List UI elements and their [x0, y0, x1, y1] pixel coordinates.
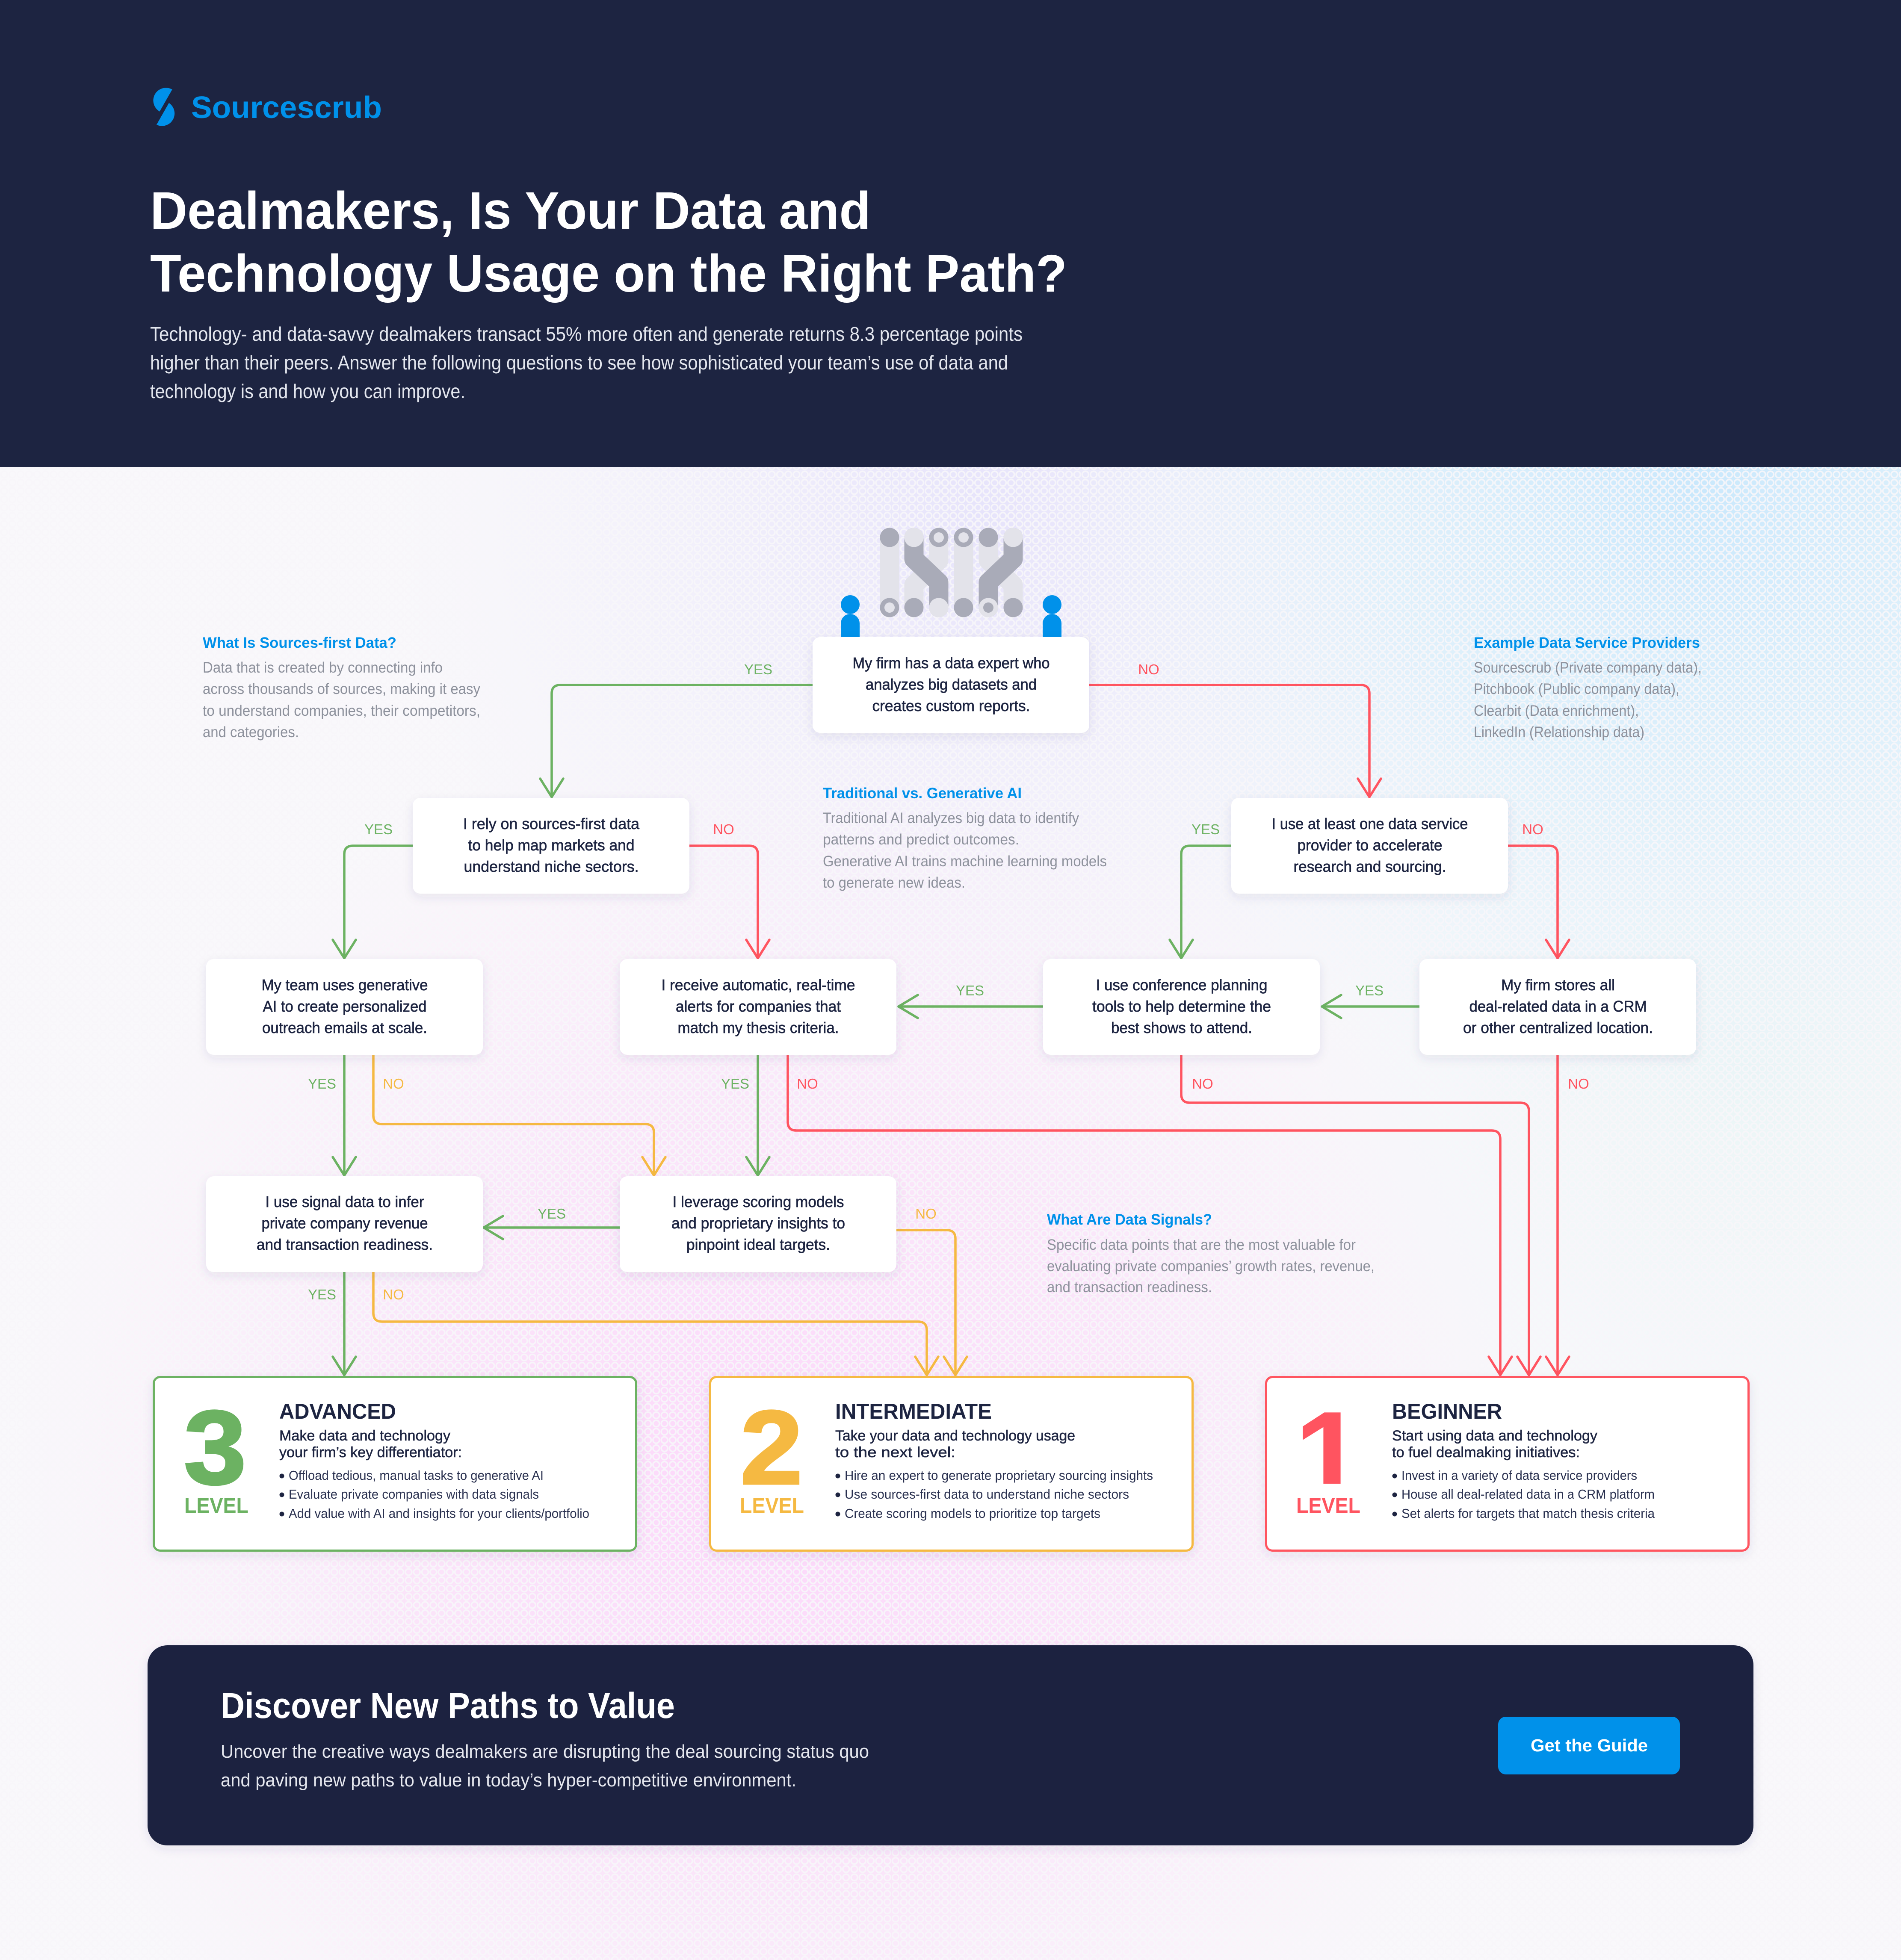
level bullet list: House all deal-related data in a CRM platform [1401, 1487, 1655, 1502]
question card: data service provider [1231, 798, 1508, 894]
level bullet list: Create scoring models to prioritize top targets [845, 1506, 1100, 1521]
question card: CRM: or other centralized location. [1463, 1019, 1653, 1036]
arrow: data provider no [1508, 846, 1569, 958]
note: traditional vs generative AI [823, 785, 1107, 891]
logo: Sourcescrub [153, 88, 382, 126]
level label: LEVEL [1296, 1494, 1360, 1517]
level subhead: Take your data and technology usage [835, 1428, 1075, 1444]
question card: conference planning [1043, 959, 1320, 1055]
arrow labels: NO [1522, 821, 1543, 837]
arrow: alerts yes [746, 1055, 769, 1175]
note: sources-first data: and categories. [203, 724, 299, 741]
arrow labels: NO [1138, 661, 1159, 677]
arrow labels: NO [797, 1076, 818, 1092]
intro text: technology is and how you can improve. [150, 380, 465, 402]
question card: scoring models: I leverage scoring models [672, 1193, 844, 1210]
panel: level 2 intermediate [710, 1377, 1192, 1550]
note: sources-first data [203, 635, 480, 741]
icon: crossing data paths [880, 528, 1023, 617]
icon: right person [1043, 595, 1061, 638]
button: get the guide [1498, 1717, 1680, 1774]
note: traditional vs generative AI: patterns and predict outcomes. [823, 831, 1019, 848]
arrow labels: YES [1355, 983, 1384, 998]
level bullet list: Set alerts for targets that match thesis criteria [1401, 1506, 1655, 1521]
question card: scoring models: and proprietary insights to [671, 1214, 845, 1232]
intro text [150, 323, 1023, 402]
level subhead: to the next level: [835, 1444, 955, 1461]
arrow: data provider yes [1170, 846, 1231, 958]
question card: data expert: creates custom reports. [872, 697, 1030, 714]
question card: data service provider: I use at least one data service [1272, 815, 1468, 832]
arrow labels: YES [538, 1206, 566, 1222]
cta body: Uncover the creative ways dealmakers are disrupting the deal sourcing status quo [221, 1741, 869, 1762]
flowchart background [0, 467, 1901, 1960]
note: example data service providers: Clearbit (Data enrichment), [1474, 703, 1639, 719]
note: traditional vs generative AI: Traditional vs. Generative AI [823, 785, 1022, 802]
arrow labels: YES [956, 983, 984, 998]
arrow: CRM yes [1322, 995, 1419, 1018]
title: Dealmakers, Is Your Data and [150, 182, 871, 240]
level bullet list: Hire an expert to generate proprietary sourcing insights [845, 1468, 1153, 1483]
note: example data service providers [1474, 635, 1702, 741]
note: data signals: evaluating private companies’ growth rates, revenue, [1047, 1258, 1375, 1275]
question card: generative AI outreach: AI to create personalized [263, 998, 427, 1015]
note: example data service providers: LinkedIn (Relationship data) [1474, 724, 1644, 741]
level subhead: your firm’s key differentiator: [279, 1444, 462, 1461]
question card: data service provider: provider to accelerate [1298, 836, 1442, 854]
panel: call to action [148, 1645, 1753, 1845]
arrow: alerts no [788, 1055, 1512, 1375]
note: data signals [1047, 1211, 1375, 1296]
title [150, 182, 1067, 303]
question card: data expert: My firm has a data expert who [853, 654, 1050, 672]
arrow labels [308, 661, 1589, 1302]
arrow: generative AI yes [333, 1055, 356, 1175]
level bullet list: Add value with AI and insights for your clients/portfolio [289, 1506, 589, 1521]
question card: data expert [813, 637, 1089, 733]
note: example data service providers: Example Data Service Providers [1474, 635, 1700, 651]
question card: signal data: and transaction readiness. [257, 1236, 433, 1253]
arrow: scoring yes [484, 1216, 620, 1239]
note: sources-first data: Data that is created by connecting info [203, 659, 443, 676]
question card: data expert: analyzes big datasets and [866, 676, 1037, 693]
question card: scoring models: pinpoint ideal targets. [686, 1236, 830, 1253]
question card: sources-first data: to help map markets and [468, 836, 635, 854]
arrow labels: NO [1568, 1076, 1589, 1092]
arrow labels: NO [713, 821, 734, 837]
note: sources-first data: What Is Sources-first Data? [203, 635, 396, 651]
level bullet list [280, 1468, 589, 1521]
question card: generative AI outreach [206, 959, 483, 1055]
arrow labels: YES [744, 661, 772, 677]
level subhead: to fuel dealmaking initiatives: [1392, 1444, 1580, 1461]
note: traditional vs generative AI: Traditional AI analyzes big data to identify [823, 810, 1079, 827]
question card: sources-first data [413, 798, 689, 894]
arrow labels: YES [1191, 821, 1220, 837]
arrow labels: YES [308, 1287, 336, 1302]
question card: CRM: deal-related data in a CRM [1469, 998, 1647, 1015]
header background [0, 0, 1901, 467]
level bullet list: Invest in a variety of data service providers [1401, 1468, 1637, 1483]
arrow: sources-first yes [333, 846, 413, 958]
question card: real-time alerts: match my thesis criteria. [677, 1019, 839, 1036]
note: data signals: and transaction readiness. [1047, 1279, 1212, 1296]
arrow: sources-first no [689, 846, 769, 958]
arrow labels: YES [721, 1076, 749, 1092]
intro text: higher than their peers. Answer the following questions to see how sophisticated your team’s use of data and [150, 351, 1008, 374]
note: data signals: Specific data points that are the most valuable for [1047, 1237, 1356, 1253]
arrow labels: YES [308, 1076, 336, 1092]
question card: sources-first data: understand niche sectors. [464, 858, 639, 875]
level subhead: Start using data and technology [1392, 1428, 1597, 1444]
question card: CRM: My firm stores all [1501, 976, 1615, 994]
question card: sources-first data: I rely on sources-first data [463, 815, 640, 832]
icon: logo mark [153, 88, 174, 126]
question card: signal data [206, 1176, 483, 1272]
icon: left person [841, 595, 860, 638]
arrow: first question no [1089, 685, 1381, 797]
cta body [221, 1741, 869, 1791]
level bullet list: Use sources-first data to understand niche sectors [845, 1487, 1129, 1502]
level title: ADVANCED [279, 1399, 396, 1423]
arrow: conference planning yes [899, 995, 1043, 1018]
level bullet list [836, 1468, 1153, 1521]
question card: generative AI outreach: outreach emails at scale. [262, 1019, 427, 1036]
question card: conference planning: tools to help determine the [1092, 998, 1271, 1015]
arrow: conference planning no [1181, 1055, 1540, 1375]
arrow: signal data no [373, 1272, 938, 1375]
button: get the guide: Get the Guide [1531, 1736, 1648, 1755]
question card: signal data: I use signal data to infer [265, 1193, 424, 1210]
level subhead [279, 1428, 462, 1461]
arrow: first question yes [540, 685, 813, 797]
note: data signals: What Are Data Signals? [1047, 1211, 1212, 1228]
arrow: CRM no [1546, 1055, 1569, 1375]
level number 2: 2 [740, 1389, 803, 1506]
note: traditional vs generative AI: Generative AI trains machine learning models [823, 853, 1107, 870]
cta body: and paving new paths to value in today’s hyper-competitive environment. [221, 1770, 796, 1791]
arrow: signal data yes [333, 1272, 356, 1375]
arrow: scoring no [896, 1230, 967, 1375]
question card: real-time alerts [620, 959, 896, 1055]
panel: level 1 beginner [1266, 1377, 1748, 1550]
arrow: generative AI no [373, 1055, 665, 1175]
question card: real-time alerts: I receive automatic, real-time [661, 976, 855, 994]
level bullet list [1392, 1468, 1655, 1521]
note: traditional vs generative AI: to generate new ideas. [823, 874, 965, 891]
note: sources-first data: to understand companies, their competitors, [203, 703, 480, 719]
cta heading: Discover New Paths to Value [221, 1685, 675, 1726]
question card: data service provider: research and sourcing. [1293, 858, 1446, 875]
level subhead: Make data and technology [279, 1428, 450, 1444]
question card: real-time alerts: alerts for companies that [676, 998, 841, 1015]
note: example data service providers: Sourcescrub (Private company data), [1474, 659, 1702, 676]
intro text: Technology- and data-savvy dealmakers transact 55% more often and generate returns 8.3 percentage points [150, 323, 1023, 345]
wordmark: Sourcescrub [191, 91, 382, 125]
question card: conference planning: best shows to attend. [1111, 1019, 1252, 1036]
arrow labels: NO [383, 1076, 404, 1092]
level number 1: 1 [1294, 1386, 1364, 1526]
question card: conference planning: I use conference planning [1096, 976, 1268, 994]
question card: generative AI outreach: My team uses generative [262, 976, 428, 994]
arrow labels: NO [915, 1206, 937, 1222]
level bullet list: Evaluate private companies with data signals [289, 1487, 539, 1502]
question card: CRM [1419, 959, 1696, 1055]
arrow labels: NO [1192, 1076, 1213, 1092]
title: Technology Usage on the Right Path? [150, 245, 1067, 303]
arrow labels: YES [364, 821, 393, 837]
question card: signal data: private company revenue [262, 1214, 428, 1232]
panel: level 3 advanced [154, 1377, 636, 1550]
note: sources-first data: across thousands of sources, making it easy [203, 681, 480, 697]
arrow labels: NO [383, 1287, 404, 1302]
level label: LEVEL [740, 1494, 804, 1517]
level bullet list: Offload tedious, manual tasks to generative AI [289, 1468, 544, 1483]
level subhead [835, 1428, 1075, 1461]
level number 3: 3 [184, 1389, 246, 1506]
level title: INTERMEDIATE [835, 1399, 992, 1423]
level subhead [1392, 1428, 1597, 1461]
level label: LEVEL [184, 1494, 248, 1517]
question card: scoring models [620, 1176, 896, 1272]
level title: BEGINNER [1392, 1399, 1502, 1423]
note: example data service providers: Pitchbook (Public company data), [1474, 681, 1679, 697]
